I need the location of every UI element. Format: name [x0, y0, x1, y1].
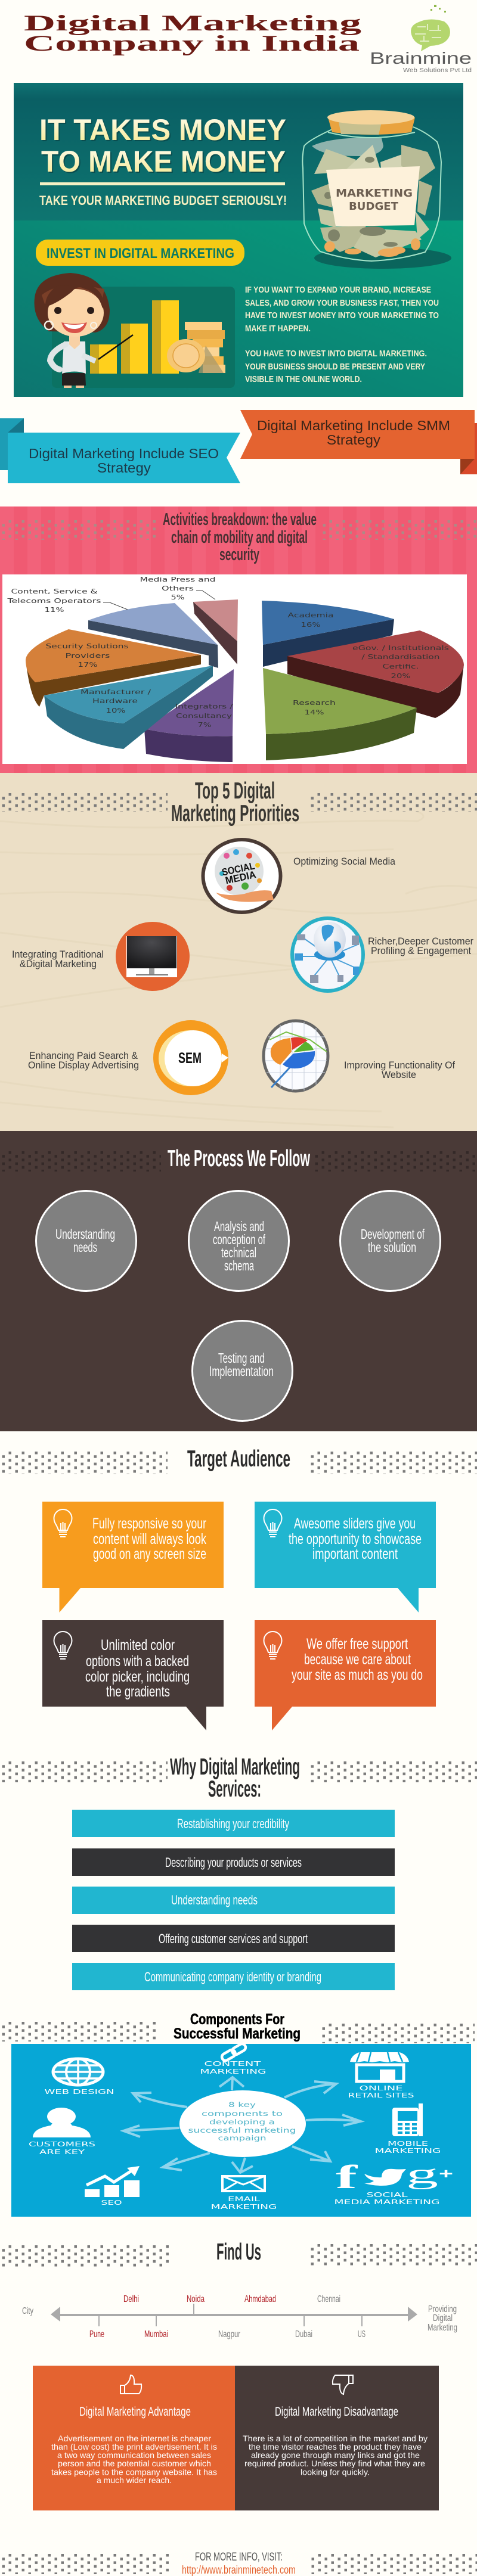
icon: phone / mobile marketing: MARKETING — [374, 2147, 441, 2155]
callout: free support: because we care about — [304, 1651, 411, 1668]
center hub: developing a — [209, 2118, 275, 2126]
heading — [170, 1754, 300, 1802]
step: testing: Testing and — [218, 1350, 265, 1366]
jar illustration — [302, 110, 451, 269]
icon: phone / mobile marketing — [374, 2103, 441, 2155]
heading: Activities breakdown: the value — [163, 510, 317, 529]
pie labels: Security Solutions — [45, 642, 129, 650]
label: enhancing paid search — [28, 1050, 139, 1071]
pie labels: Telecoms Operators — [7, 597, 101, 605]
bar: company identity — [72, 1963, 395, 1990]
ribbon: SEO strategy: Strategy — [97, 460, 151, 476]
tagline: TAKE YOUR MARKETING BUDGET SERIOUSLY! — [39, 193, 287, 208]
step: analysis: technical — [221, 1245, 256, 1260]
heading: Find Us — [216, 2239, 261, 2265]
center hub: components to — [202, 2109, 283, 2118]
priority: functionality chart — [264, 1021, 328, 1091]
title: Digital Marketing — [24, 11, 362, 36]
pie labels: 7% — [198, 721, 211, 729]
pie labels: Certific. — [383, 663, 419, 670]
slice: content — [88, 603, 218, 668]
pie labels: 11% — [44, 606, 64, 614]
bars — [90, 300, 179, 374]
pie labels: / Standardisation — [361, 653, 440, 661]
timeline of cities: Delhi — [123, 2294, 139, 2304]
bar: describing products: Describing your products or services — [165, 1855, 302, 1870]
callout: unlimited color: color picker, including — [85, 1668, 190, 1685]
bar: understanding needs — [72, 1887, 395, 1914]
pie labels: 20% — [391, 672, 410, 680]
timeline of cities: City — [22, 2306, 33, 2316]
bar: restablishing credibility — [72, 1810, 395, 1837]
timeline of cities: Dubai — [295, 2329, 312, 2339]
callout: awesome sliders: Awesome sliders give you — [294, 1515, 416, 1532]
callout: awesome sliders — [255, 1502, 436, 1612]
logo: Brainmine: Web Solutions Pvt Ltd — [403, 67, 472, 74]
pie labels: 16% — [301, 621, 321, 629]
icon: link / content marketing — [200, 2043, 266, 2075]
step: analysis: conception of — [213, 1232, 265, 1247]
icon: person / customers are key: CUSTOMERS — [29, 2140, 95, 2148]
label: improving functionality: Improving Functionality Of — [344, 1059, 455, 1071]
icon: globe / web design — [44, 2059, 114, 2096]
heading: Why Digital Marketing — [170, 1754, 300, 1780]
step: testing — [192, 1320, 292, 1421]
timeline of cities: Pune — [89, 2329, 104, 2339]
arrows — [123, 2077, 361, 2173]
pie chart — [7, 576, 464, 762]
label: enhancing paid search: Online Display Advertising — [28, 1059, 139, 1071]
panel: advantage: Digital Marketing Advantage — [79, 2405, 191, 2419]
headline: TO MAKE MONEY — [42, 146, 287, 179]
icon: store / online retail: RETAIL SITES — [348, 2092, 414, 2099]
body copy: YOU HAVE TO INVEST INTO DIGITAL MARKETING. — [245, 349, 427, 359]
heading — [163, 510, 317, 564]
heading: Target Audience — [187, 1446, 290, 1472]
footer: more info — [0, 2551, 477, 2576]
title: Company in India — [24, 32, 360, 56]
priority: social media: MEDIA — [224, 869, 257, 886]
callout: free support: your site as much as you do — [292, 1667, 423, 1683]
pie labels: 5% — [171, 593, 185, 601]
timeline of cities: Nagpur — [218, 2329, 240, 2339]
callout: free support: We offer free support — [306, 1636, 408, 1652]
bar: customer services: Offering customer services and support — [159, 1931, 308, 1946]
heading: chain of mobility and digital — [171, 528, 308, 547]
section: target audience — [0, 1446, 477, 1730]
panel: advantage: a two way communication between sales — [57, 2450, 211, 2460]
ribbon: SMM strategy: Digital Marketing Include SMM — [257, 418, 450, 433]
icon: person / customers are key: ARE KEY — [39, 2148, 85, 2156]
heading — [174, 2011, 301, 2042]
panel: advantage: person and the potential customer which — [58, 2459, 211, 2468]
section: find us — [0, 2239, 477, 2510]
label: optimizing social media: Optimizing Social Media — [293, 856, 396, 867]
icon: store / online retail — [348, 2052, 414, 2099]
center hub: successful marketing — [188, 2126, 296, 2134]
bar: understanding needs: Understanding needs — [171, 1893, 258, 1907]
heading: Services: — [208, 1776, 261, 1802]
panel: disadvantage: looking for quickly. — [301, 2467, 370, 2476]
timeline of cities: Mumbai — [144, 2329, 168, 2339]
bar: customer services — [72, 1925, 395, 1952]
jar illustration: BUDGET — [349, 200, 399, 213]
callout: awesome sliders: the opportunity to showcase — [289, 1531, 422, 1548]
section: components for successful marketing — [0, 2011, 475, 2217]
step: understanding needs — [36, 1191, 136, 1291]
jar illustration: MARKETING — [336, 187, 413, 200]
body copy: HAVE TO INVEST MONEY INTO YOUR MARKETING TO — [245, 311, 439, 321]
pie labels: Others — [162, 585, 194, 592]
pie labels — [7, 576, 449, 729]
step: understanding needs: Understanding — [55, 1226, 115, 1242]
heading: security — [219, 545, 259, 564]
step: testing: Implementation — [209, 1363, 274, 1379]
icon: envelope / email marketing: MARKETING — [211, 2203, 277, 2211]
label: richer deeper customer: Profiling & Engagement — [371, 945, 471, 956]
pie labels: Content, Service & — [11, 588, 98, 595]
panel: it takes money hero — [14, 83, 463, 397]
panel: activities breakdown — [0, 507, 477, 773]
icon: social networks / social media marketing: SOCIAL — [366, 2191, 408, 2199]
panel: advantage: than (Low cost) the print advertisement. It is — [51, 2442, 217, 2451]
slice: research — [263, 668, 417, 760]
icon: envelope / email marketing: EMAIL — [228, 2195, 261, 2203]
priority: social media: SOCIAL — [221, 860, 256, 878]
section: why digital marketing services — [0, 1754, 477, 1990]
body copy: SALES, AND GROW YOUR BUSINESS FAST, THEN YOU — [245, 299, 439, 308]
icon: store / online retail: ONLINE — [359, 2084, 403, 2092]
step: analysis — [188, 1191, 289, 1291]
icon: growth chart / SEO: SEO — [101, 2199, 122, 2207]
pie labels: Research — [293, 699, 336, 707]
callout: fully responsive — [42, 1502, 224, 1612]
slice: integrators — [144, 669, 234, 762]
slice: eGov — [287, 630, 464, 718]
step: analysis: schema — [224, 1258, 254, 1273]
timeline of cities: Noida — [187, 2294, 205, 2304]
callout: fully responsive: good on any screen size — [93, 1546, 206, 1562]
bar: restablishing credibility: Restablishing your credibility — [177, 1816, 289, 1831]
body copy: VISIBLE IN THE ONLINE WORLD. — [245, 375, 362, 384]
pill: invest in digital marketing: INVEST IN DIGITAL MARKETING — [47, 246, 234, 262]
heading: Marketing Priorities — [171, 801, 299, 826]
icon: growth chart / SEO — [85, 2166, 140, 2207]
pie labels: Consultancy — [176, 712, 233, 720]
priority: customer profiling network — [292, 918, 363, 991]
pie labels: Manufacturer / — [80, 688, 151, 696]
heading: The Process We Follow — [168, 1146, 310, 1172]
step: development: the solution — [368, 1239, 416, 1255]
slice: media — [193, 599, 238, 664]
label: richer deeper customer — [368, 936, 473, 956]
panel: advantage: a much wider reach. — [97, 2475, 172, 2485]
priority: SEM: SEM — [178, 1050, 202, 1067]
label: integrating traditional: &Digital Marketing — [20, 958, 97, 970]
body copy: YOUR BUSINESS SHOULD BE PRESENT AND VERY — [245, 362, 425, 372]
timeline of cities: US — [358, 2329, 366, 2339]
slice: security — [26, 629, 201, 707]
pie labels: Providers — [66, 652, 110, 660]
icon: social networks / social media marketing: f — [336, 2159, 359, 2196]
label: integrating traditional: Integrating Traditional — [12, 949, 104, 960]
icon: link / content marketing: MARKETING — [200, 2068, 266, 2075]
body copy: MAKE IT HAPPEN. — [245, 324, 311, 334]
timeline of cities: Digital — [433, 2313, 453, 2323]
panel: advantage — [33, 2366, 235, 2510]
title — [24, 11, 362, 56]
icon: globe / web design: WEB DESIGN — [44, 2088, 114, 2096]
pie labels: 17% — [78, 661, 98, 669]
callout: free support — [255, 1620, 436, 1730]
pie labels: eGov. / Institutionals — [352, 644, 449, 652]
label: integrating traditional — [12, 949, 104, 970]
icon: link / content marketing: CONTENT — [204, 2060, 261, 2068]
pill: invest in digital marketing — [36, 240, 244, 266]
icon: phone / mobile marketing: MOBILE — [388, 2140, 428, 2148]
logo: Brainmine — [370, 5, 472, 74]
body copy — [245, 285, 439, 384]
panel: disadvantage: already gone through many links and got the — [251, 2450, 420, 2460]
center hub — [179, 2090, 306, 2157]
pie labels: 10% — [106, 707, 125, 714]
panel: the process we follow — [0, 1131, 477, 1431]
priority: social media — [203, 840, 280, 912]
pie labels: Hardware — [92, 697, 138, 705]
headline: TO MAKE MONEY — [41, 145, 286, 178]
heading: Successful Marketing — [174, 2025, 301, 2042]
slice: academia — [262, 601, 394, 667]
callout: unlimited color: Unlimited color — [101, 1637, 175, 1654]
headline: IT TAKES MONEY — [39, 113, 286, 147]
panel: advantage: takes people to the company website. It has — [51, 2467, 217, 2476]
timeline of cities: Chennai — [317, 2294, 340, 2304]
heading — [171, 778, 299, 826]
panel: disadvantage: Digital Marketing Disadvantage — [275, 2405, 398, 2419]
icon: envelope / email marketing — [211, 2176, 277, 2211]
headline — [39, 113, 287, 179]
priority: integrating traditional and digital — [116, 922, 190, 991]
step: understanding needs: needs — [73, 1239, 97, 1255]
callout: unlimited color — [42, 1620, 224, 1730]
center hub: campaign — [218, 2134, 266, 2142]
icon: person / customers are key — [29, 2108, 95, 2156]
chart card with woman presenter — [35, 273, 235, 388]
ribbon: SEO strategy: Digital Marketing Include SEO — [29, 446, 219, 461]
logo: Brainmine: Brainmine — [370, 49, 472, 67]
timeline of cities — [22, 2294, 457, 2339]
priority: SEM — [153, 1020, 228, 1095]
callout: fully responsive: Fully responsive so your — [92, 1515, 206, 1532]
center hub: 8 key — [228, 2100, 256, 2109]
ribbon: SMM strategy: Strategy — [327, 432, 381, 448]
footer: more info: FOR MORE INFO, VISIT: — [195, 2551, 283, 2563]
label: improving functionality: Website — [382, 1069, 416, 1080]
step: development — [340, 1191, 440, 1291]
callout: awesome sliders: important content — [312, 1546, 398, 1562]
label: richer deeper customer: Richer,Deeper Customer — [368, 936, 473, 947]
headline: IT TAKES MONEY — [41, 114, 287, 148]
pie labels: Academia — [287, 611, 334, 619]
bar: company identity: Communicating company identity or branding — [144, 1969, 321, 1984]
panel: disadvantage: the time visitor reaches the product they have — [249, 2442, 422, 2451]
pie labels: Media Press and — [140, 576, 216, 583]
heading: Components For — [190, 2011, 284, 2028]
callout: unlimited color: options with a backed — [86, 1653, 189, 1670]
icon: social networks / social media marketing: MEDIA MARKETING — [334, 2198, 440, 2206]
pie labels: 14% — [304, 709, 324, 716]
panel: top 5 digital marketing priorities — [0, 773, 477, 1131]
pie labels: Integrators / — [175, 703, 233, 710]
bar: describing products — [72, 1848, 395, 1876]
panel: disadvantage: required product. Unless they find what they are — [244, 2459, 425, 2468]
icon: social networks / social media marketing: + — [439, 2166, 453, 2182]
ribbon: SEO strategy — [0, 418, 240, 483]
panel: advantage: Advertisement on the internet is cheaper — [58, 2434, 211, 2443]
panel: disadvantage — [235, 2366, 439, 2510]
woman — [35, 273, 133, 388]
icon: social networks / social media marketing — [334, 2158, 453, 2206]
label: enhancing paid search: Enhancing Paid Search & — [29, 1050, 138, 1061]
timeline of cities: Providing — [428, 2304, 457, 2314]
callout: unlimited color: the gradients — [106, 1683, 170, 1700]
label: improving functionality — [344, 1059, 455, 1080]
icon: social networks / social media marketing: g — [406, 2158, 438, 2190]
timeline of cities: Marketing — [428, 2323, 457, 2333]
heading: Top 5 Digital — [195, 778, 275, 804]
callout: fully responsive: content will always look — [93, 1531, 206, 1548]
body copy: IF YOU WANT TO EXPAND YOUR BRAND, INCREASE — [245, 285, 431, 295]
slice: manufacturer — [44, 666, 213, 749]
step: development: Development of — [361, 1226, 425, 1242]
timeline of cities: Ahmdabad — [244, 2294, 276, 2304]
step: analysis: Analysis and — [214, 1219, 264, 1234]
coins — [167, 322, 225, 373]
ribbon: SMM strategy — [240, 410, 477, 474]
panel: disadvantage: There is a lot of competition in the market and by — [243, 2434, 428, 2443]
